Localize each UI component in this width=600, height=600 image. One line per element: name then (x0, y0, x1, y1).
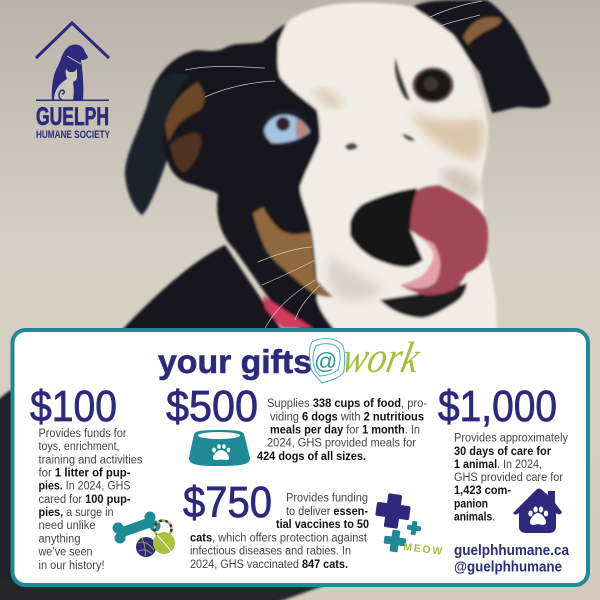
amount: $750 (183, 478, 443, 571)
amount: $1,000: $1,000 (438, 382, 557, 431)
at sign: @ (314, 348, 337, 374)
description (38, 428, 143, 572)
description: Provides approximately (454, 433, 568, 445)
panel (12, 330, 588, 585)
description: anything (38, 534, 80, 546)
title (158, 332, 425, 383)
description: 1 animal. In 2024, (454, 459, 542, 471)
logo: Guelph Humane Society (36, 23, 110, 141)
description: Supplies 338 cups of food, pro- (267, 398, 427, 410)
description: need unlike (38, 520, 96, 532)
ground line (36, 100, 109, 101)
website and social handle: guelphhumane.ca (454, 542, 570, 559)
at sign (309, 339, 345, 383)
description: GHS provided care for (454, 472, 563, 484)
icon: medical crosses and meow: MEOW (403, 541, 443, 558)
description: pies. In 2024, GHS (38, 481, 131, 493)
description: panion (454, 498, 488, 510)
title: your gifts (158, 343, 312, 380)
description: cared for 100 pup- (38, 494, 131, 506)
description: meals per day for 1 month. In (270, 424, 420, 436)
wordmark: GUELPH (36, 103, 109, 131)
description: 2024, GHS provided meals for (267, 438, 416, 450)
website and social handle: @guelphhumane (454, 558, 562, 576)
description: for 1 litter of pup- (38, 468, 131, 480)
icon: toys (112, 512, 175, 557)
description: 2024, GHS vaccinated 847 cats. (190, 559, 348, 571)
description: animals. (454, 512, 495, 524)
amount: $100: $100 (30, 382, 117, 431)
amount: $500: $500 (166, 382, 258, 431)
amount: $750: $750 (183, 478, 272, 527)
description: tial vaccines to 50 (276, 519, 369, 531)
description: in our history! (38, 560, 104, 572)
description: we’ve seen (38, 546, 92, 558)
roof (36, 23, 109, 58)
description: to deliver essen- (286, 506, 368, 518)
work script: work (338, 332, 425, 382)
description: training and activities (38, 454, 143, 466)
tagline: HUMANE SOCIETY (36, 129, 110, 141)
icon: dog bowl (189, 430, 250, 466)
amount: $1,000 (438, 382, 568, 533)
description: toys, enrichment, (38, 441, 120, 453)
amount: $100 (30, 382, 175, 572)
icon: medical crosses and meow (374, 492, 443, 558)
description: viding 6 dogs with 2 nutritious (270, 412, 424, 424)
description: pies, a surge in (38, 507, 114, 519)
description (190, 493, 369, 571)
description: infectious diseases and rabies. In (190, 546, 351, 558)
description (257, 398, 427, 463)
description: Provides funding (286, 493, 368, 505)
whiskers (185, 1, 482, 328)
website and social handle (454, 542, 570, 576)
amount: $500 (166, 382, 427, 466)
description: 424 dogs of all sizes. (257, 451, 366, 463)
description: cats, which offers protection against (190, 532, 368, 544)
description: 1,423 com- (454, 485, 511, 497)
description: Provides funds for (38, 428, 127, 440)
icon: house with paw (513, 488, 562, 533)
description (454, 433, 568, 524)
dog and cat silhouette (52, 45, 88, 100)
description: 30 days of care for (454, 446, 551, 458)
